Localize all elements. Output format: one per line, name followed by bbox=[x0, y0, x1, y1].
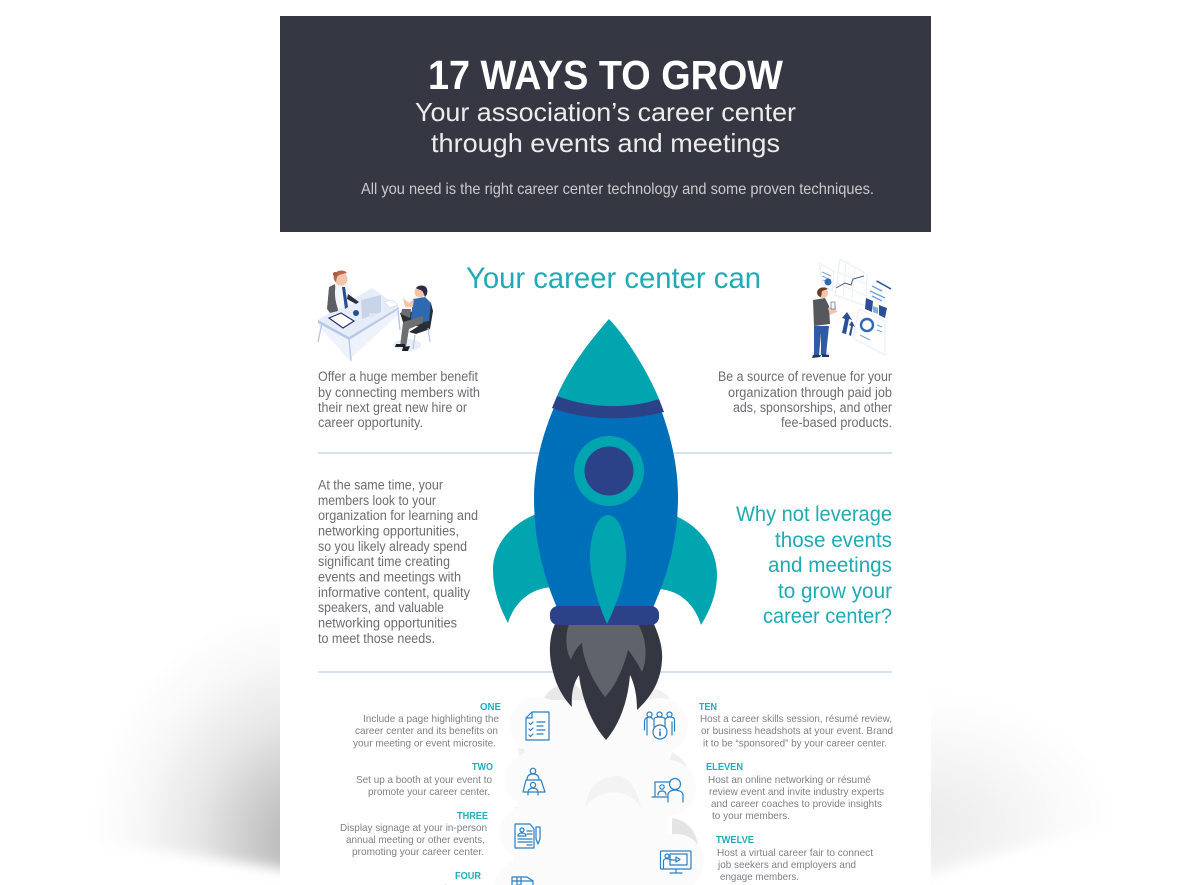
text: member benefit: by connecting members with bbox=[318, 385, 480, 400]
step eleven: ELEVEN bbox=[706, 761, 743, 773]
step two: Set up a booth at your event to bbox=[356, 774, 492, 786]
step four bbox=[327, 870, 481, 885]
right fin bbox=[658, 516, 717, 625]
text: learning and networking bbox=[318, 478, 478, 646]
step three bbox=[340, 810, 488, 858]
step three: THREE bbox=[457, 810, 488, 822]
step ten: or business headshots at your event. Brand bbox=[701, 725, 893, 737]
text: revenue source: fee-based products. bbox=[781, 415, 892, 430]
step one: ONE bbox=[480, 701, 501, 713]
step twelve: job seekers and employers and bbox=[717, 859, 856, 871]
step three: promoting your career center. bbox=[352, 846, 484, 858]
text: revenue source: Be a source of revenue for your bbox=[718, 369, 892, 384]
smoke clouds bbox=[494, 684, 704, 885]
icon: team info bbox=[644, 712, 674, 739]
callout: why not leverage bbox=[736, 503, 892, 628]
subtitle: through events and meetings bbox=[431, 128, 780, 158]
step eleven: review event and invite industry experts bbox=[709, 786, 884, 798]
text: learning and networking: members look to your bbox=[318, 493, 436, 508]
left fin bbox=[493, 514, 553, 623]
text: member benefit: career opportunity. bbox=[318, 415, 423, 430]
illustration: man with analytics charts bbox=[812, 259, 891, 358]
header panel bbox=[280, 16, 931, 232]
text: learning and networking: networking opportunities, bbox=[318, 524, 459, 538]
text: member benefit: their next great new hire or bbox=[318, 400, 467, 415]
text: learning and networking: informative content, quality bbox=[318, 585, 470, 600]
icon: folder bbox=[512, 877, 533, 885]
step one: career center and its benefits on bbox=[355, 725, 498, 737]
icon: online coaching bbox=[652, 778, 683, 802]
collar band bbox=[552, 396, 664, 418]
step ten: it to be “sponsored” by your career center. bbox=[703, 738, 887, 750]
text: learning and networking: events and meetings with bbox=[318, 570, 461, 584]
callout: why not leverage: Why not leverage bbox=[736, 503, 892, 526]
callout: why not leverage: career center? bbox=[763, 605, 892, 628]
text: learning and networking: speakers, and valuable bbox=[318, 600, 444, 615]
callout: why not leverage: to grow your bbox=[778, 580, 892, 603]
step one bbox=[353, 701, 501, 750]
flame inner bbox=[566, 622, 646, 697]
intro line: All you need is the right career center technology and some proven techniques. bbox=[361, 181, 874, 198]
step eleven bbox=[706, 761, 884, 822]
step twelve: TWELVE bbox=[716, 834, 754, 846]
step ten: Host a career skills session, résumé review, bbox=[700, 713, 892, 725]
step twelve: engage members. bbox=[720, 871, 799, 883]
page drop shadow: left bbox=[80, 620, 300, 872]
body bbox=[534, 322, 678, 610]
illustration: office meeting bbox=[318, 271, 433, 361]
step eleven: to your members. bbox=[712, 810, 790, 822]
icon: booth bbox=[523, 768, 545, 795]
callout: why not leverage: and meetings bbox=[768, 554, 892, 577]
window bbox=[574, 436, 644, 506]
text: learning and networking: networking opportunities bbox=[318, 616, 457, 630]
subtitle: Your association’s career center bbox=[415, 97, 796, 127]
step two: TWO bbox=[472, 761, 493, 773]
step ten bbox=[699, 701, 893, 750]
center fin bbox=[590, 515, 626, 624]
icon: checklist bbox=[526, 712, 549, 740]
base band bbox=[550, 606, 659, 625]
step twelve bbox=[716, 834, 873, 883]
text: learning and networking: At the same time, your bbox=[318, 478, 443, 492]
title: 17 WAYS TO GROW bbox=[428, 52, 783, 98]
subtitle bbox=[415, 97, 796, 158]
step eleven: and career coaches to provide insights bbox=[711, 798, 882, 810]
step twelve: Host a virtual career fair to connect bbox=[717, 847, 873, 859]
icon: resume and pen bbox=[515, 824, 540, 848]
icon: virtual career fair bbox=[660, 851, 691, 873]
flame outer bbox=[550, 622, 662, 740]
text: revenue source: ads, sponsorships, and other bbox=[733, 400, 892, 415]
infographic page bbox=[280, 232, 931, 885]
step one: Include a page highlighting the bbox=[363, 713, 499, 725]
text: learning and networking: significant time creating bbox=[318, 554, 450, 569]
step two: promote your career center. bbox=[368, 786, 490, 798]
step three: Display signage at your in-person bbox=[340, 822, 487, 834]
step four: FOUR bbox=[455, 870, 481, 882]
section heading: Your career center can bbox=[466, 262, 761, 295]
text: learning and networking: organization for learning and bbox=[318, 508, 478, 523]
step two bbox=[356, 761, 493, 798]
page drop shadow: right bbox=[915, 680, 1120, 880]
step eleven: Host an online networking or résumé bbox=[708, 774, 871, 786]
text: member benefit bbox=[318, 369, 480, 430]
text: revenue source: organization through paid job bbox=[728, 385, 892, 400]
text: learning and networking: to meet those needs. bbox=[318, 631, 435, 646]
text: member benefit: Offer a huge member benefit bbox=[318, 369, 478, 384]
text: learning and networking: so you likely already spend bbox=[318, 539, 467, 554]
text: revenue source bbox=[718, 369, 892, 430]
step three: annual meeting or other events, bbox=[346, 834, 485, 846]
nose cone bbox=[557, 319, 659, 406]
rocket bbox=[493, 319, 717, 740]
step one: your meeting or event microsite. bbox=[353, 738, 496, 750]
callout: why not leverage: those events bbox=[775, 529, 892, 552]
step ten: TEN bbox=[699, 701, 717, 713]
